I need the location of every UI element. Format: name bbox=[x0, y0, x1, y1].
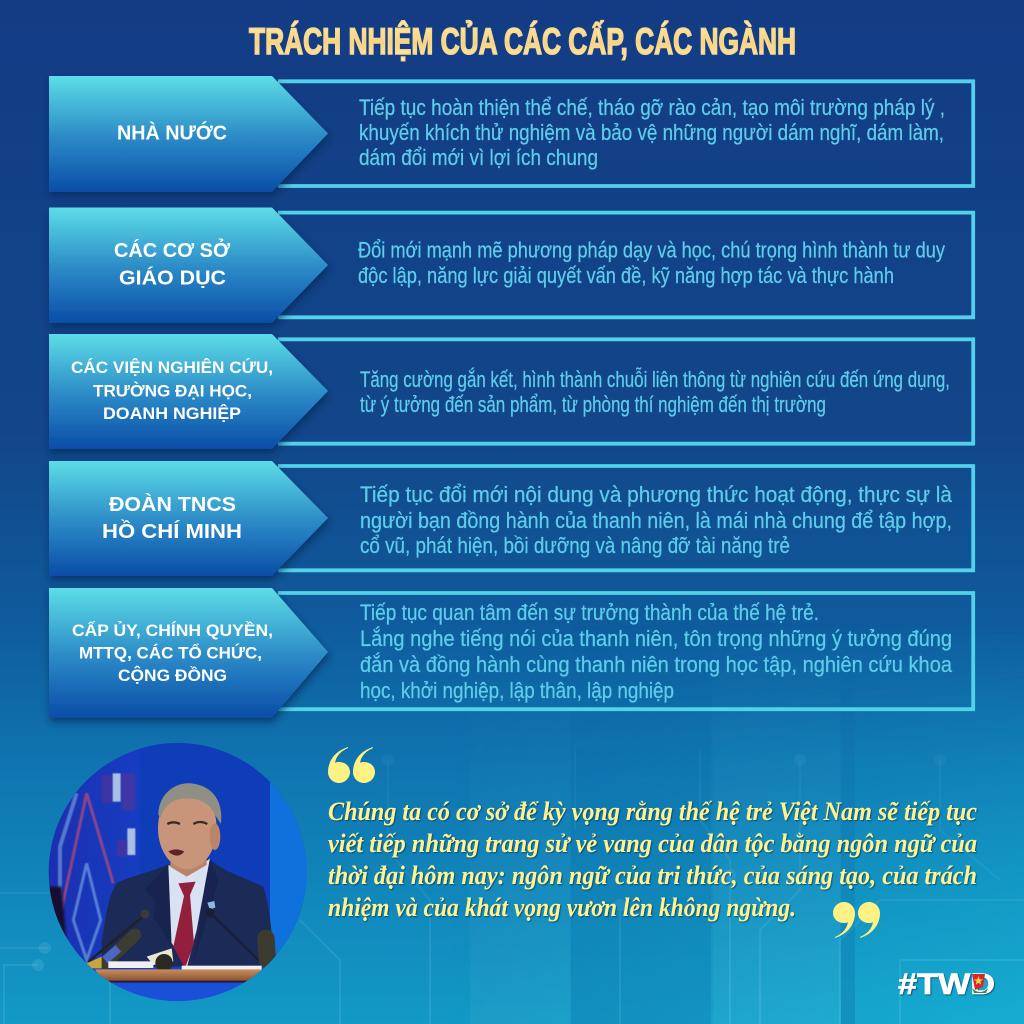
text: Các cơ sở giáo dục bbox=[358, 238, 945, 288]
arrow label: Cấp ủy, chính quyền: CẤP ỦY, CHÍNH QUYỀN, bbox=[72, 621, 273, 640]
arrow label: Đoàn TNCS Hồ Chí Minh: ĐOÀN TNCS bbox=[109, 493, 236, 516]
logo: #TWD with youth union emblem: #TWD bbox=[898, 968, 995, 1001]
panel: Các cơ sở giáo dục bbox=[49, 208, 973, 323]
text: Cấp ủy, chính quyền: Lắng nghe tiếng nói của thanh niên, tôn trọng những ý tưởng đúng bbox=[360, 626, 952, 651]
suit bbox=[102, 858, 273, 967]
arrow label: Các viện nghiên cứu: TRƯỜNG ĐẠI HỌC, bbox=[93, 382, 252, 400]
emblem bbox=[972, 974, 988, 993]
arrow label: Nhà nước bbox=[49, 76, 328, 192]
arrow label: Nhà nước: NHÀ NƯỚC bbox=[117, 120, 227, 144]
arrow label: Các viện nghiên cứu: CÁC VIỆN NGHIÊN CỨU, bbox=[71, 358, 273, 377]
text: Cấp ủy, chính quyền: đắn và đồng hành cùng thanh niên trong học tập, nghiên cứu khoa bbox=[360, 652, 953, 677]
title: TRÁCH NHIỆM CỦA CÁC CẤP, CÁC NGÀNH bbox=[249, 20, 796, 62]
panel: Các viện nghiên cứu bbox=[49, 334, 973, 449]
quote text: nhiệm và của khát vọng vươn lên không ngừng. bbox=[328, 893, 796, 922]
quote text: thời đại hôm nay: ngôn ngữ của tri thức, của sáng tạo, của trách bbox=[328, 861, 977, 890]
portrait photo bbox=[47, 740, 313, 1007]
text: Nhà nước: dám đổi mới vì lợi ích chung bbox=[359, 145, 598, 170]
arrow label: Các cơ sở giáo dục: CÁC CƠ SỞ bbox=[114, 238, 231, 262]
arrow label: Cấp ủy, chính quyền bbox=[49, 588, 328, 718]
icon: closing quote mark bbox=[833, 902, 880, 938]
text: Cấp ủy, chính quyền: Tiếp tục quan tâm đến sự trưởng thành của thế hệ trẻ. bbox=[360, 600, 819, 625]
hair bbox=[158, 783, 221, 824]
neck and head bbox=[170, 858, 207, 877]
panel outline: Các viện nghiên cứu bbox=[278, 339, 973, 444]
icon: opening quote mark bbox=[328, 747, 375, 783]
papers bbox=[108, 961, 153, 968]
arrow label: Cấp ủy, chính quyền: MTTQ, CÁC TỔ CHỨC, bbox=[79, 644, 262, 662]
panel outline: Đoàn TNCS Hồ Chí Minh bbox=[278, 466, 973, 570]
text: Các cơ sở giáo dục: độc lập, năng lực giải quyết vấn đề, kỹ năng hợp tác và thực hành bbox=[358, 263, 894, 288]
arrow label: Các viện nghiên cứu bbox=[49, 334, 328, 449]
text: Nhà nước: khuyến khích thử nghiệm và bảo vệ những người dám nghĩ, dám làm, bbox=[359, 120, 944, 145]
text: Nhà nước: Tiếp tục hoàn thiện thể chế, tháo gỡ rào cản, tạo môi trường pháp lý , bbox=[359, 95, 945, 120]
text: Nhà nước bbox=[359, 95, 945, 170]
arrow label: Các cơ sở giáo dục bbox=[49, 208, 328, 323]
arrow label: Cấp ủy, chính quyền: CỘNG ĐỒNG bbox=[118, 666, 227, 685]
podium bbox=[95, 969, 262, 981]
panel: Nhà nước bbox=[49, 76, 973, 192]
text: Các viện nghiên cứu bbox=[360, 367, 950, 417]
background bbox=[0, 431, 1024, 1024]
panel: Đoàn TNCS Hồ Chí Minh bbox=[49, 461, 973, 576]
panel outline: Các cơ sở giáo dục bbox=[278, 213, 973, 317]
text: Cấp ủy, chính quyền bbox=[360, 600, 953, 703]
quote text: viết tiếp những trang sử vẻ vang của dân tộc bằng ngôn ngữ của bbox=[328, 829, 977, 858]
tie bbox=[173, 882, 196, 968]
quote text bbox=[328, 797, 977, 922]
panel outline: Nhà nước bbox=[278, 81, 973, 186]
text: Đoàn TNCS Hồ Chí Minh: cổ vũ, phát hiện, bồi dưỡng và nâng đỡ tài năng trẻ bbox=[360, 533, 790, 558]
shirt bbox=[167, 858, 210, 968]
lapel pin bbox=[207, 901, 215, 910]
arrow label: Đoàn TNCS Hồ Chí Minh: HỒ CHÍ MINH bbox=[102, 519, 242, 543]
arrow label: Các viện nghiên cứu: DOANH NGHIỆP bbox=[103, 404, 241, 423]
lapels bbox=[145, 858, 218, 963]
facial features bbox=[167, 822, 207, 824]
quote text: Chúng ta có cơ sở để kỳ vọng rằng thế hệ trẻ Việt Nam sẽ tiếp tục bbox=[328, 797, 977, 826]
text: Cấp ủy, chính quyền: học, khởi nghiệp, lập thân, lập nghiệp bbox=[360, 678, 674, 703]
microphones bbox=[88, 915, 145, 962]
text: Đoàn TNCS Hồ Chí Minh bbox=[360, 482, 953, 558]
text: Đoàn TNCS Hồ Chí Minh: Tiếp tục đổi mới nội dung và phương thức hoạt động, thực sự là bbox=[360, 482, 953, 507]
text: Đoàn TNCS Hồ Chí Minh: người bạn đồng hành của thanh niên, là mái nhà chung để tập hợp, bbox=[360, 508, 952, 533]
arrow label: Các cơ sở giáo dục: GIÁO DỤC bbox=[119, 266, 226, 290]
text: Các viện nghiên cứu: từ ý tưởng đến sản phẩm, từ phòng thí nghiệm đến thị trường bbox=[360, 392, 826, 417]
arrow label: Đoàn TNCS Hồ Chí Minh bbox=[49, 461, 328, 576]
panel: Cấp ủy, chính quyền bbox=[49, 588, 973, 718]
panel outline: Cấp ủy, chính quyền bbox=[278, 593, 973, 709]
